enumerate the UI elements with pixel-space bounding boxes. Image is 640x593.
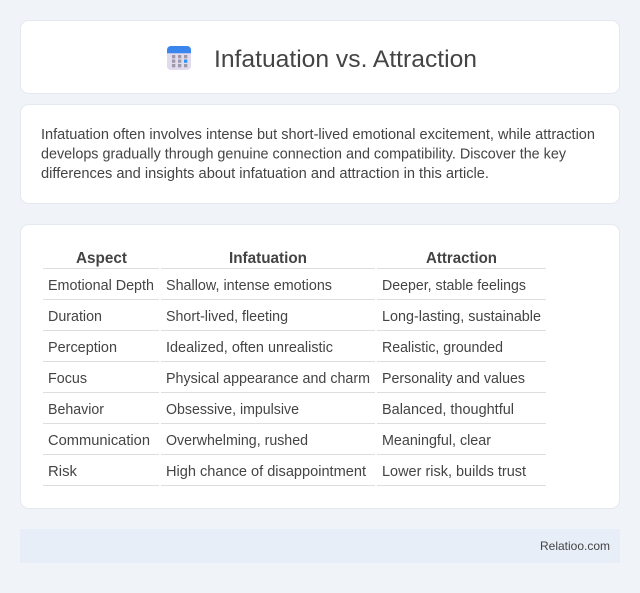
row: perception: Perception — [48, 340, 117, 356]
row: risk: High chance of disappointment — [166, 464, 366, 480]
row: risk: Lower risk, builds trust — [382, 464, 526, 480]
table header row: Infatuation — [229, 250, 307, 267]
title: Infatuation vs. Attraction — [214, 46, 477, 73]
row: risk — [48, 464, 526, 480]
row: emotional depth: Shallow, intense emotions — [166, 278, 332, 294]
table header row — [76, 250, 497, 267]
row: emotional depth: Emotional Depth — [48, 278, 154, 294]
row: communication — [48, 433, 491, 449]
row: focus: Personality and values — [382, 371, 525, 387]
panel: comparison table — [20, 224, 620, 508]
row: behavior — [48, 402, 514, 418]
table header row: Aspect — [76, 250, 127, 267]
row: emotional depth: Deeper, stable feelings — [382, 278, 526, 294]
row: focus: Focus — [48, 371, 87, 387]
icon: calendar — [167, 46, 191, 70]
row: perception — [48, 340, 503, 356]
row: communication: Overwhelming, rushed — [166, 433, 308, 449]
row: emotional depth — [48, 278, 526, 294]
row: behavior: Obsessive, impulsive — [166, 402, 299, 418]
row: duration: Duration — [48, 309, 102, 325]
row: communication: Communication — [48, 433, 150, 449]
text: introduction paragraph: differences and insights about infatuation and attraction in this article. — [41, 166, 489, 182]
row: risk: Risk — [48, 464, 78, 480]
text: introduction paragraph: develops gradually through genuine connection and compatibility. Discover the key — [41, 146, 567, 162]
row: duration: Long-lasting, sustainable — [382, 309, 541, 325]
row: behavior: Balanced, thoughtful — [382, 402, 514, 418]
panel: title card — [20, 20, 620, 94]
text: introduction paragraph — [41, 127, 595, 182]
row: behavior: Behavior — [48, 402, 104, 418]
row: perception: Idealized, often unrealistic — [166, 340, 333, 356]
footer bar — [20, 529, 620, 563]
panel: introduction — [20, 104, 620, 204]
row: communication: Meaningful, clear — [382, 433, 491, 449]
footer text: source: Relatioo.com — [540, 539, 610, 553]
text: introduction paragraph: Infatuation often involves intense but short-lived emotional excitement, while attraction — [41, 127, 595, 143]
row: perception: Realistic, grounded — [382, 340, 503, 356]
row: focus: Physical appearance and charm — [166, 371, 370, 387]
row: duration: Short-lived, fleeting — [166, 309, 288, 325]
row: duration — [48, 309, 541, 325]
table header row: Attraction — [426, 250, 497, 267]
row: focus — [48, 371, 525, 387]
